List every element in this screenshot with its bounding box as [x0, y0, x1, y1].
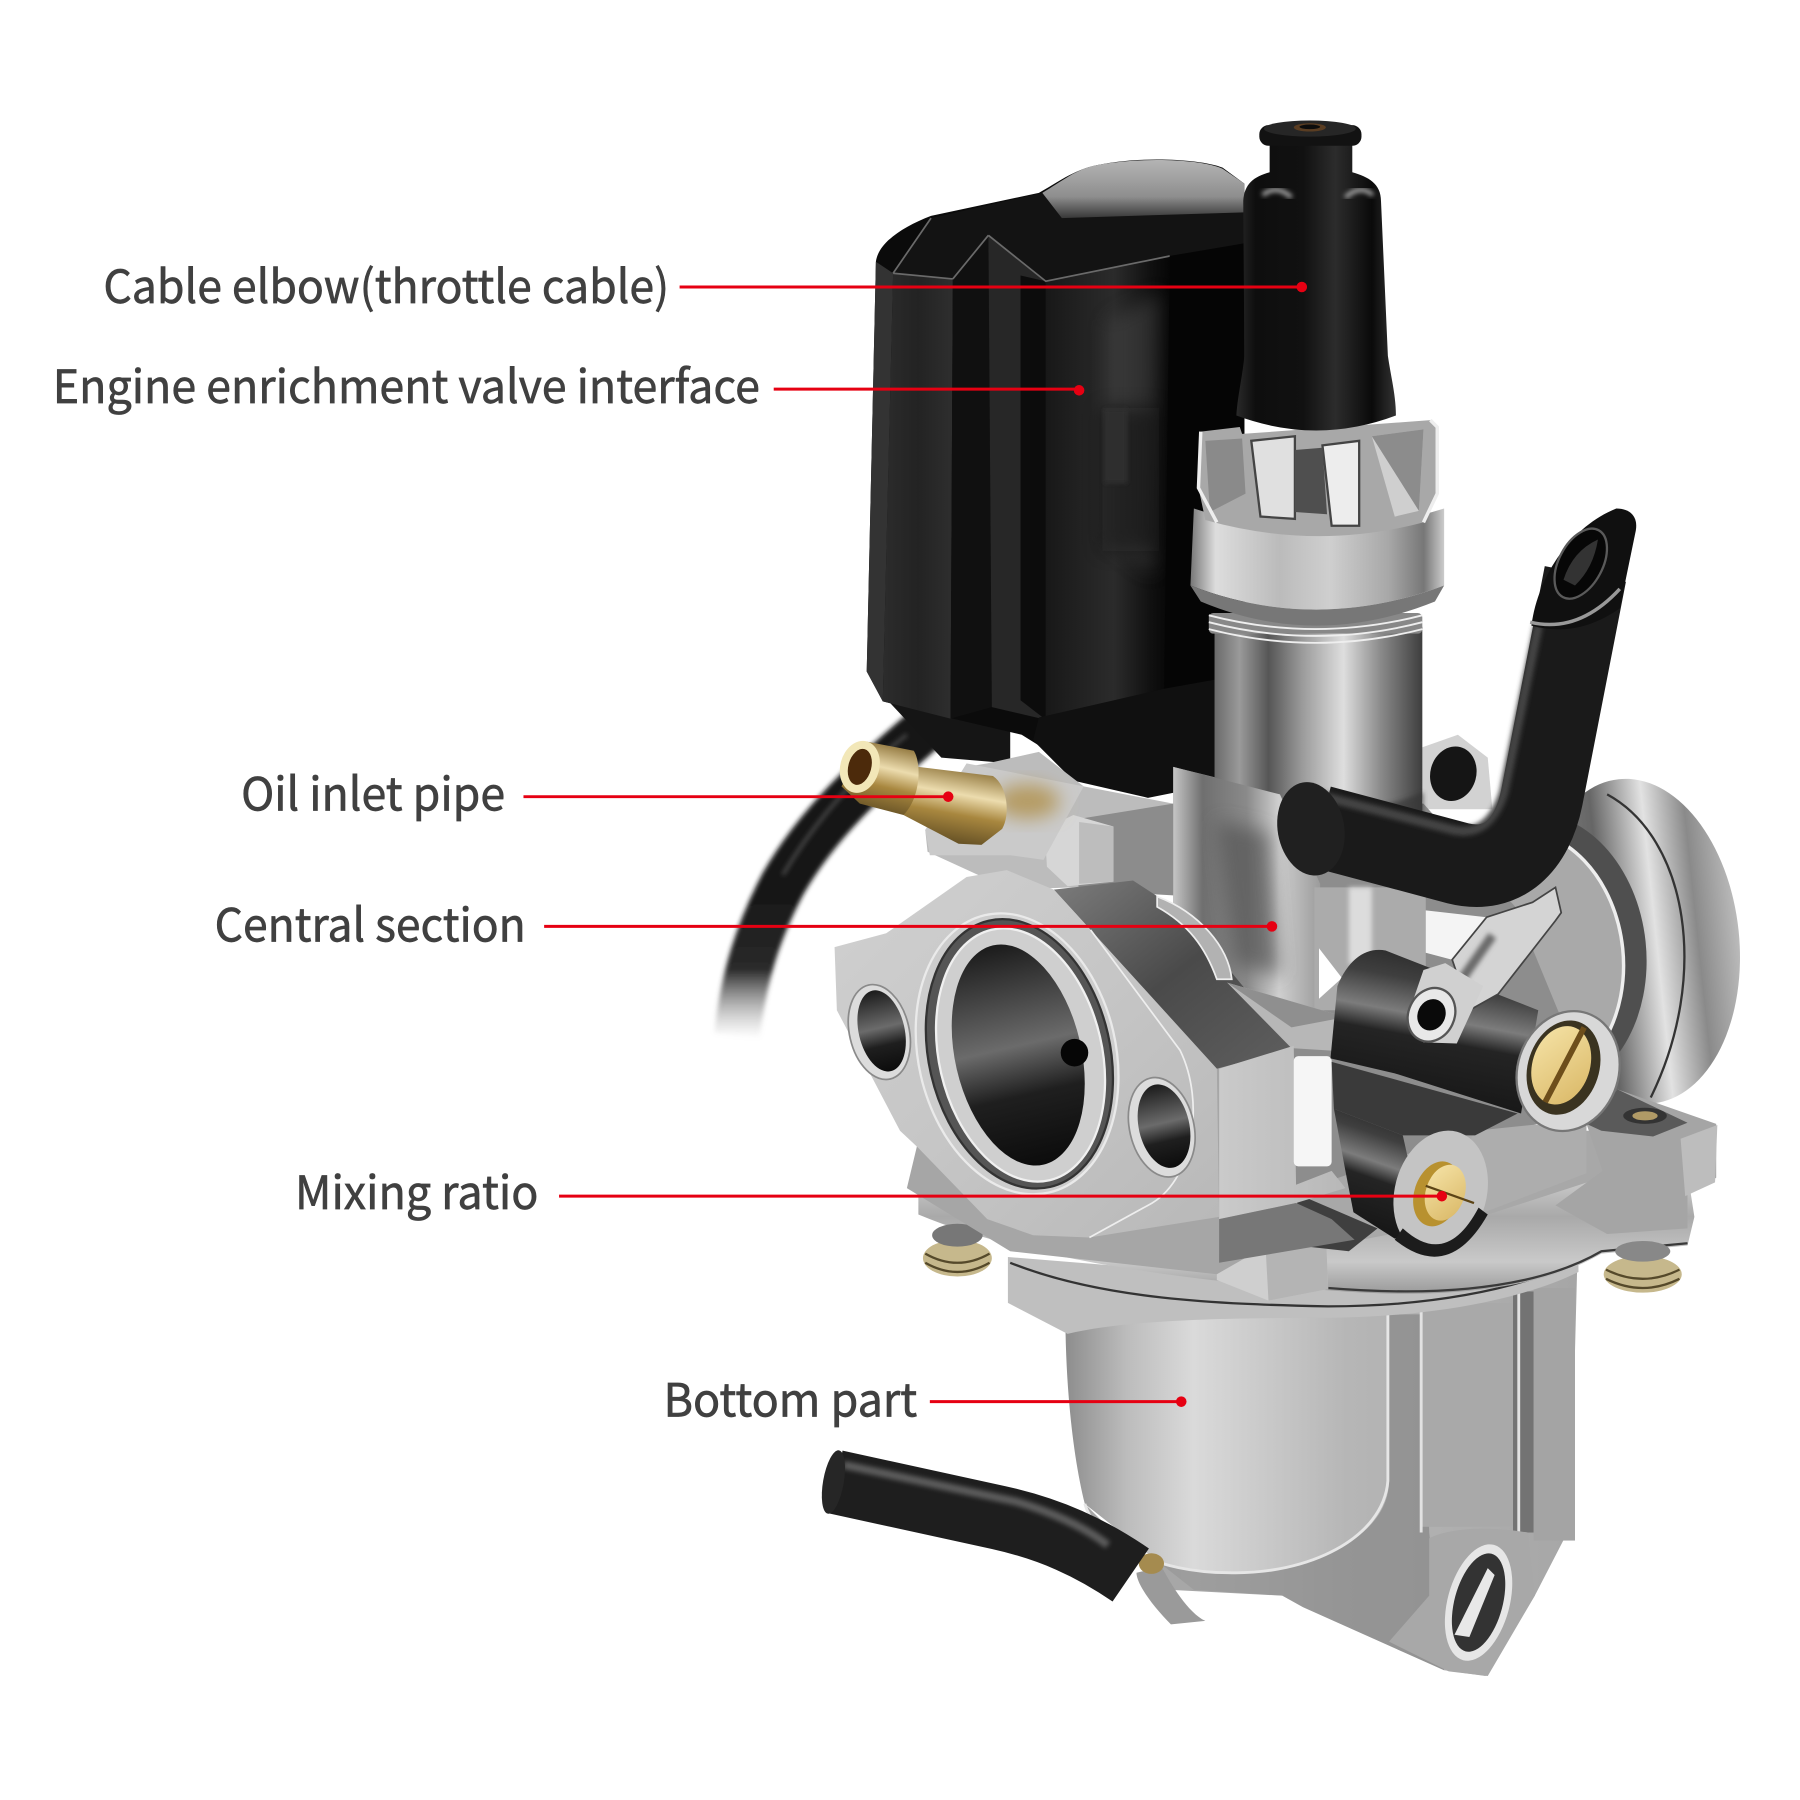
- right bolt hole: [1119, 1071, 1204, 1184]
- label: oil inlet pipe: [241, 758, 953, 824]
- label: central section: Central section: [215, 889, 526, 955]
- dome under cylinders: [1423, 1119, 1586, 1228]
- label: bottom part: Bottom part: [664, 1365, 917, 1431]
- label: mixing ratio: Mixing ratio: [295, 1157, 538, 1223]
- housing ribs: [951, 235, 992, 719]
- housing left edge: [867, 262, 893, 701]
- housing left panel: [883, 273, 953, 719]
- chrome tab: [1217, 1232, 1328, 1301]
- float bowl: [1065, 1263, 1577, 1676]
- brass oil inlet fitting and mount: [834, 736, 1084, 860]
- plate backing under cylinders: [1291, 1131, 1603, 1288]
- lower mixture cylinder with brass screw: [1332, 1062, 1518, 1266]
- label: mixing ratio: [295, 1157, 1447, 1223]
- upper plate: [918, 1165, 1694, 1294]
- black drain stub hose and clip: [818, 1449, 1205, 1624]
- carburetor illustration: [737, 121, 1756, 1676]
- upper chrome bracket: [925, 752, 1173, 893]
- housing base: [1033, 677, 1234, 798]
- housing front panel: [1046, 256, 1170, 720]
- bowl mounting plate and bowl: [918, 1089, 1717, 1676]
- upper idle cylinder with slotted brass screw: [1330, 950, 1635, 1145]
- bowl lip: [1008, 1246, 1578, 1334]
- side face: [1219, 1046, 1345, 1219]
- shelf: [1227, 983, 1345, 1052]
- central block: [1173, 767, 1320, 1010]
- flange face: [835, 870, 1219, 1238]
- rear mounting lug: [1419, 735, 1492, 809]
- left bolt hole: [839, 978, 919, 1086]
- solenoid: engine enrichment valve housing: [867, 159, 1244, 798]
- body backing fills: [1173, 767, 1596, 1217]
- throttle column collar: [1190, 509, 1444, 643]
- label: central section: [215, 889, 1277, 955]
- housing top face: [1042, 160, 1244, 227]
- right throttle drum: [1413, 768, 1756, 1114]
- cable elbow black tube: [1236, 121, 1396, 430]
- label: oil inlet pipe: Oil inlet pipe: [241, 758, 505, 824]
- label: cable elbow: Cable elbow(throttle cable): [103, 251, 669, 317]
- bowl mounting ear: [1389, 1529, 1535, 1676]
- right plate ear: [1555, 1089, 1716, 1234]
- lower ledge: [1219, 1203, 1355, 1263]
- label: engine enrichment valve interface: Engine enrichment valve interface: [53, 351, 760, 417]
- washers and bolts: [923, 1224, 1682, 1293]
- flange gasket ring: [889, 893, 1145, 1215]
- housing upper shoulder: [893, 193, 1244, 281]
- small chrome pipe and nipple: [1399, 887, 1561, 1049]
- central body and column: [1173, 627, 1596, 1217]
- housing right panel: [1164, 243, 1244, 746]
- black L-shaped vent hose: [1270, 509, 1636, 881]
- column: [1215, 627, 1422, 822]
- black hose behind body, fading out: [737, 703, 1010, 1035]
- label: cable elbow: [103, 251, 1307, 317]
- carburetor flange block: [835, 752, 1355, 1274]
- chrome star nut: [1198, 420, 1437, 536]
- rear flange slope: [1054, 880, 1294, 1069]
- main bore: [931, 931, 1105, 1179]
- label: bottom part: [664, 1365, 1187, 1431]
